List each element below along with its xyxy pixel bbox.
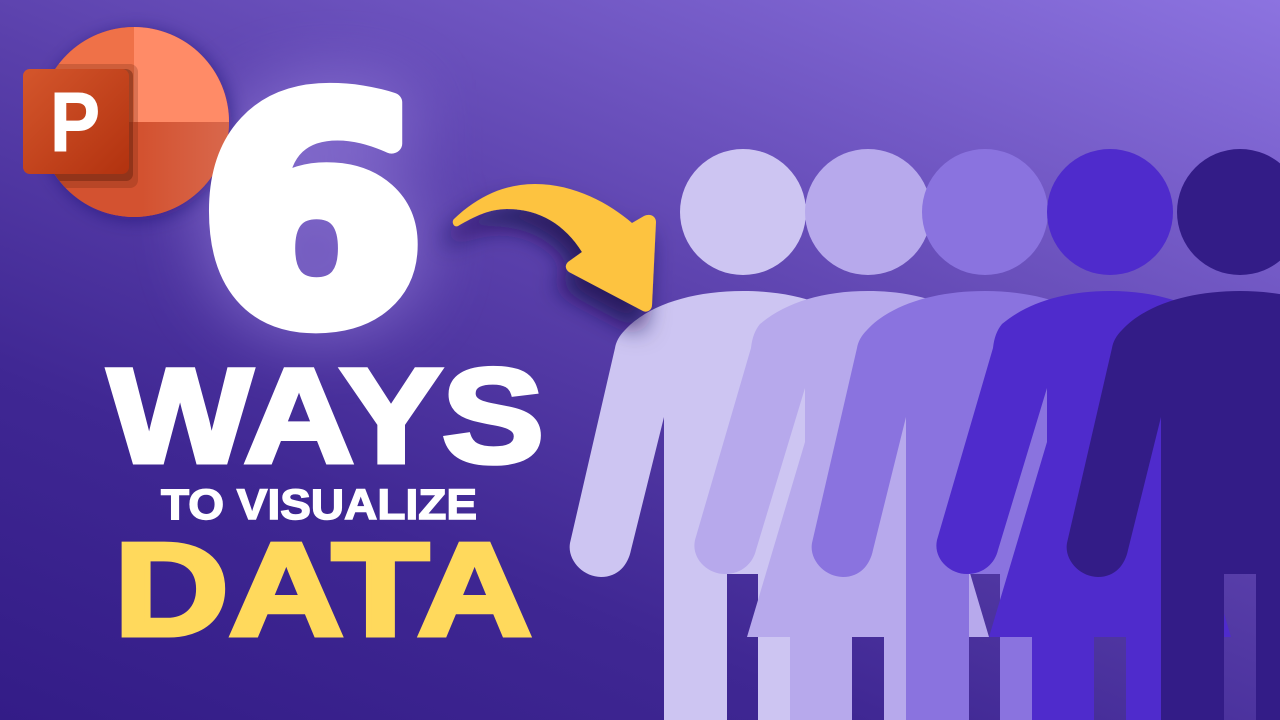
figure 1: light lilac man bbox=[570, 149, 916, 720]
figure 2: lavender woman bbox=[694, 149, 1042, 720]
subheading: TO VISUALIZE: TO VISUALIZE bbox=[161, 481, 477, 529]
figure 3: medium purple man bbox=[812, 149, 1158, 720]
figure 4: vivid violet woman bbox=[936, 149, 1280, 720]
icon: PowerPoint logo bbox=[23, 20, 234, 222]
icon: PowerPoint logo: P bbox=[50, 75, 100, 169]
heading: DATA: DATA bbox=[114, 516, 532, 663]
glow behind the number 6: 6 bbox=[200, 37, 424, 392]
heading: WAYS: WAYS bbox=[108, 342, 544, 491]
arrow: yellow curved arrow pointing at the figures bbox=[453, 184, 656, 312]
heading: number 6: 6 bbox=[200, 37, 424, 392]
figure 5: dark indigo man bbox=[1067, 149, 1280, 720]
